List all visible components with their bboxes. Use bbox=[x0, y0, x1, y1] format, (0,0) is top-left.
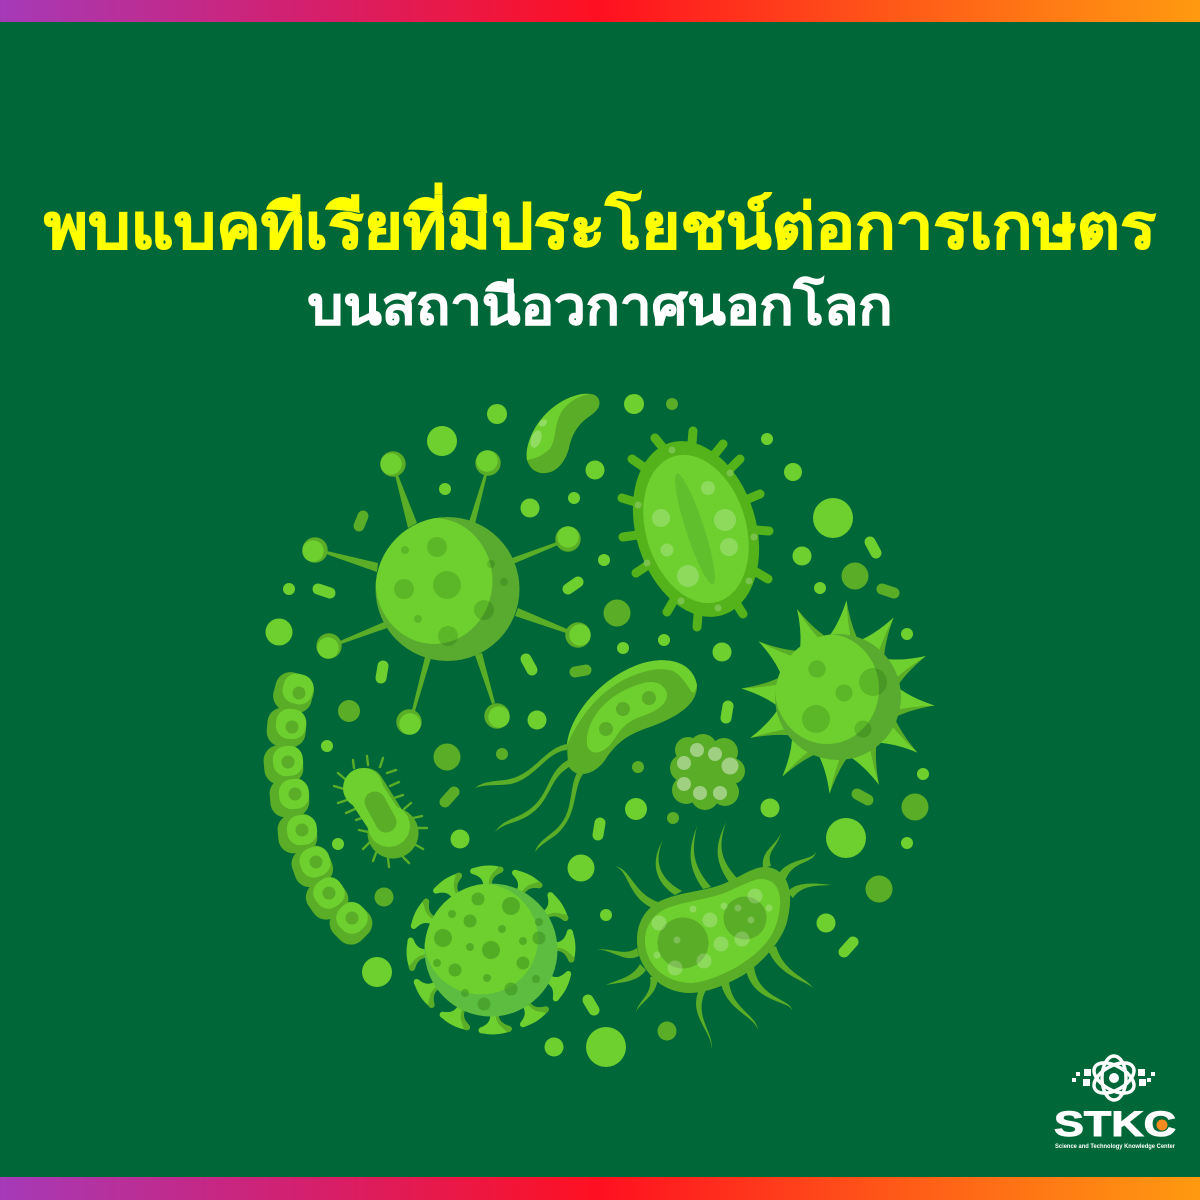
logo wordmark: STKC bbox=[1054, 1105, 1176, 1144]
STKC logo bbox=[1054, 1056, 1176, 1150]
logo tagline: Science and Technology Knowledge Center bbox=[1055, 1144, 1176, 1150]
oval bacterium with hairs bbox=[612, 425, 780, 633]
bacillus with flagella bbox=[475, 660, 697, 852]
title: พบแบคทีเรียที่มีประโยชน์ต่อการเกษตร bbox=[44, 183, 1156, 262]
floating dots and pills bbox=[266, 394, 929, 1067]
bottom gradient bar bbox=[0, 1177, 1200, 1200]
virus with ball-tipped spikes bbox=[302, 450, 591, 735]
comma-shaped bacterium bbox=[527, 394, 600, 473]
corona-shaped virus bbox=[406, 865, 576, 1035]
subtitle: บนสถานีอวกาศนอกโลก bbox=[308, 275, 892, 336]
spiky round microbe bbox=[740, 599, 936, 795]
chain of round cells bbox=[262, 669, 379, 951]
icon: atom bbox=[1072, 1056, 1155, 1100]
peanut-shaped bacterium with hairs bbox=[334, 756, 427, 867]
logo orange dot bbox=[1156, 1120, 1168, 1130]
top gradient bar bbox=[0, 0, 1200, 22]
clustered cell bbox=[670, 734, 745, 810]
flagellate bacterium with tentacles bbox=[597, 822, 831, 1049]
